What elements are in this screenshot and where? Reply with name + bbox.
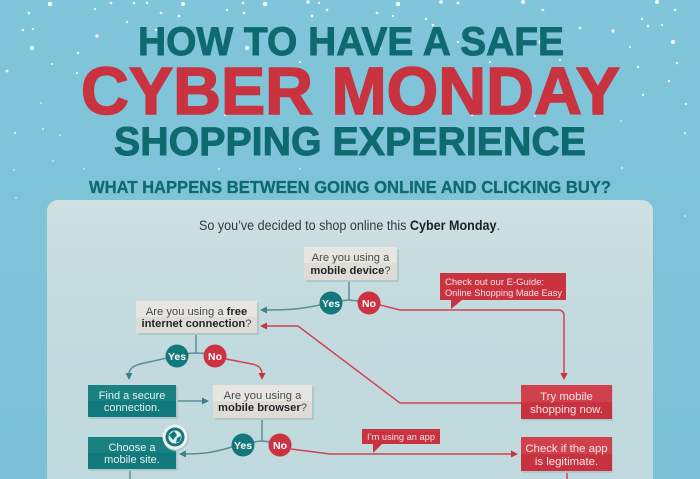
- title: SHOPPING EXPERIENCE: [114, 120, 586, 164]
- action: choose a mobile site: mobile site.: [104, 454, 160, 466]
- yes badge: mobile browser: [232, 434, 254, 456]
- callout: e-guide: Online Shopping Made Easy: [445, 288, 562, 298]
- intro text: So you’ve decided to shop online this Cyber Monday.: [199, 218, 500, 233]
- yes badge: mobile device: Yes: [322, 298, 340, 310]
- connector: check app down: [566, 471, 568, 479]
- question: mobile browser: Are you using a: [224, 390, 302, 402]
- action: find a secure connection: [88, 385, 178, 419]
- action: choose a mobile site: Choose a: [108, 442, 156, 454]
- connector: browser branches: [179, 418, 280, 458]
- action: choose a mobile site: [88, 437, 178, 471]
- action: find a secure connection: connection.: [104, 402, 160, 414]
- action: check the app: is legitimate.: [535, 456, 598, 468]
- yes badge: mobile browser: Yes: [234, 440, 252, 452]
- icon: globe badge: [162, 424, 189, 451]
- action: try mobile shopping: shopping now.: [530, 404, 603, 416]
- action: try mobile shopping: Try mobile: [540, 391, 593, 403]
- callout: using an app: I’m using an app: [367, 432, 435, 442]
- no badge: mobile browser: [268, 434, 292, 456]
- connector: choose site down: [129, 469, 131, 479]
- connector: free connection branches: [126, 333, 266, 380]
- subtitle: WHAT HAPPENS BETWEEN GOING ONLINE AND CLICKING BUY?: [89, 177, 611, 197]
- question: free internet: Are you using a free: [146, 306, 247, 318]
- callout: e-guide: [440, 273, 566, 309]
- no badge: free internet: [204, 344, 226, 368]
- title: CYBER MONDAY: [81, 54, 620, 129]
- question: mobile device: mobile device?: [310, 265, 391, 277]
- panel: flowchart: [47, 200, 653, 479]
- no badge: mobile browser: No: [273, 440, 287, 452]
- title: HOW TO HAVE A SAFE: [138, 20, 564, 64]
- question: mobile device: Are you using a: [312, 252, 390, 264]
- question: mobile device: [304, 247, 399, 282]
- question: free internet: [136, 301, 259, 335]
- callout: e-guide: Check out our E-Guide:: [445, 277, 544, 287]
- action: try mobile shopping: [521, 385, 613, 421]
- arrow: find connection to browser question: [176, 398, 209, 404]
- arrow: try mobile shopping to free connection question: [260, 322, 521, 403]
- question: free internet: internet connection?: [141, 318, 252, 330]
- arrow: no to try mobile shopping: [380, 305, 568, 380]
- no badge: mobile device: No: [362, 298, 376, 310]
- title: [81, 20, 620, 164]
- yes badge: free internet: Yes: [168, 351, 186, 363]
- arrow: no to check the app: [291, 449, 518, 458]
- action: check the app: Check if the app: [525, 443, 608, 455]
- yes badge: mobile device: [320, 292, 342, 314]
- no badge: free internet: No: [208, 351, 222, 363]
- action: check the app: [521, 437, 613, 473]
- question: mobile browser: mobile browser?: [218, 402, 307, 414]
- yes badge: free internet: [166, 344, 188, 368]
- no badge: mobile device: [358, 292, 380, 314]
- callout: using an app: [362, 429, 440, 453]
- question: mobile browser: [213, 385, 314, 420]
- action: find a secure connection: Find a secure: [99, 390, 165, 402]
- connector: first question branches: [260, 280, 369, 314]
